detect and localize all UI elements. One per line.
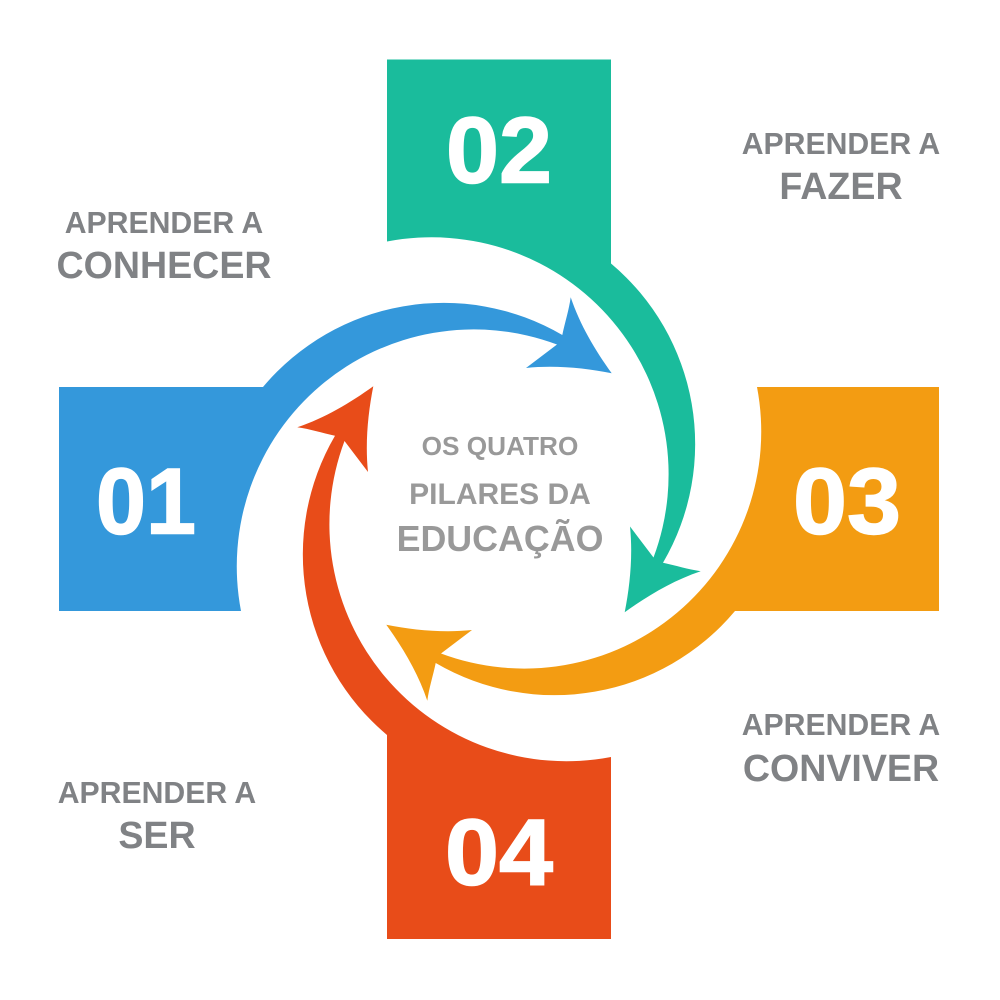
label: aprender a ser: SER xyxy=(118,814,196,856)
number 02: 02 xyxy=(446,98,552,202)
panel: pillar 04 red block and arrow xyxy=(297,386,611,939)
label: aprender a conviver: CONVIVER xyxy=(743,747,939,789)
label: aprender a fazer: APRENDER A xyxy=(742,128,940,161)
number 03: 03 xyxy=(793,448,901,554)
center title: PILARES DA xyxy=(409,478,591,511)
label: aprender a fazer: FAZER xyxy=(779,165,903,207)
panel: pillar 02 teal block and arrow xyxy=(387,60,701,612)
label: aprender a conviver: APRENDER A xyxy=(742,709,940,742)
label: aprender a fazer xyxy=(742,128,940,207)
label: aprender a conhecer: CONHECER xyxy=(56,244,272,286)
label: aprender a conhecer: APRENDER A xyxy=(65,207,263,240)
label: aprender a ser: APRENDER A xyxy=(58,777,256,810)
number 01: 01 xyxy=(96,448,196,554)
center title: OS QUATRO xyxy=(422,431,578,461)
center title: EDUCAÇÃO xyxy=(397,519,603,559)
center title xyxy=(397,431,603,559)
label: aprender a conviver xyxy=(742,709,940,789)
panel: pillar 01 blue block and arrow xyxy=(59,297,612,611)
label: aprender a conhecer xyxy=(56,207,272,286)
panel: pillar 03 orange block and arrow xyxy=(386,387,939,701)
number 04: 04 xyxy=(445,800,553,904)
label: aprender a ser xyxy=(58,777,256,856)
